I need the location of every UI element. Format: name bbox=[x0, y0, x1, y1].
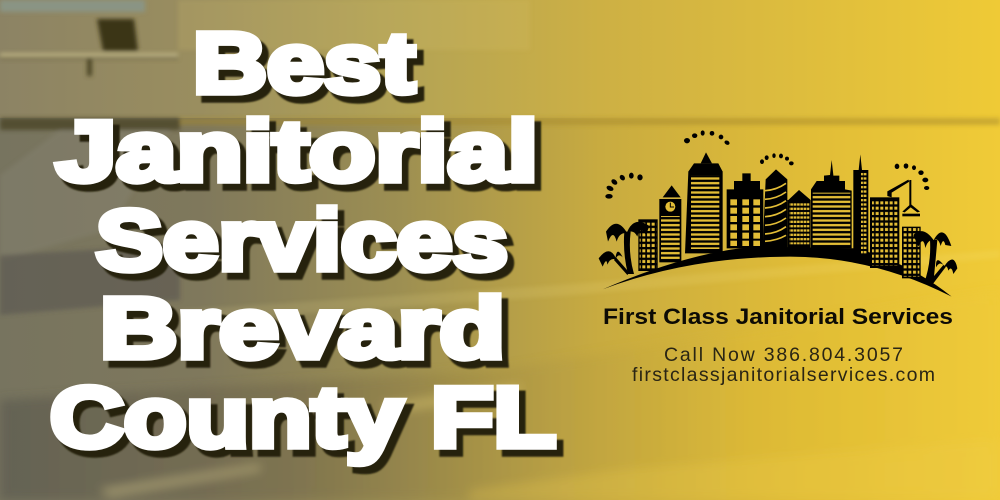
company name: First Class Janitorial Services bbox=[603, 304, 953, 329]
clock tower bbox=[659, 185, 681, 262]
hill bbox=[603, 247, 952, 297]
title: Brevard: Brevard bbox=[106, 288, 511, 383]
title: Best: Best bbox=[199, 23, 421, 118]
logo: city skyline bbox=[599, 130, 957, 297]
title: Janitorial: Janitorial bbox=[56, 104, 538, 200]
stepped window tower bbox=[727, 173, 763, 248]
crane bbox=[887, 180, 920, 216]
phone number: Call Now 386.804.3057 bbox=[664, 344, 903, 366]
grid building left bbox=[638, 219, 658, 271]
website: firstclassjanitorialservices.com bbox=[632, 364, 935, 386]
curved striped tower bbox=[763, 169, 787, 248]
title: County FL: County FL bbox=[50, 370, 556, 466]
title: Janitorial: Janitorial bbox=[62, 111, 544, 206]
title: Services: Services bbox=[102, 200, 514, 295]
spire tower bbox=[853, 154, 868, 258]
palm trees right bbox=[913, 231, 957, 283]
gridded house tower bbox=[787, 190, 811, 248]
title: Brevard: Brevard bbox=[100, 282, 505, 376]
tall striped tower bbox=[685, 152, 723, 253]
title: County FL: County FL bbox=[56, 377, 562, 472]
palm trees left bbox=[599, 222, 649, 275]
wide stepped striped tower bbox=[811, 160, 852, 248]
grid building right bbox=[870, 197, 899, 268]
title: Best: Best bbox=[193, 16, 415, 112]
title: Services: Services bbox=[96, 194, 508, 288]
grid building far right bbox=[902, 227, 921, 278]
sun rays dots bbox=[605, 130, 929, 199]
